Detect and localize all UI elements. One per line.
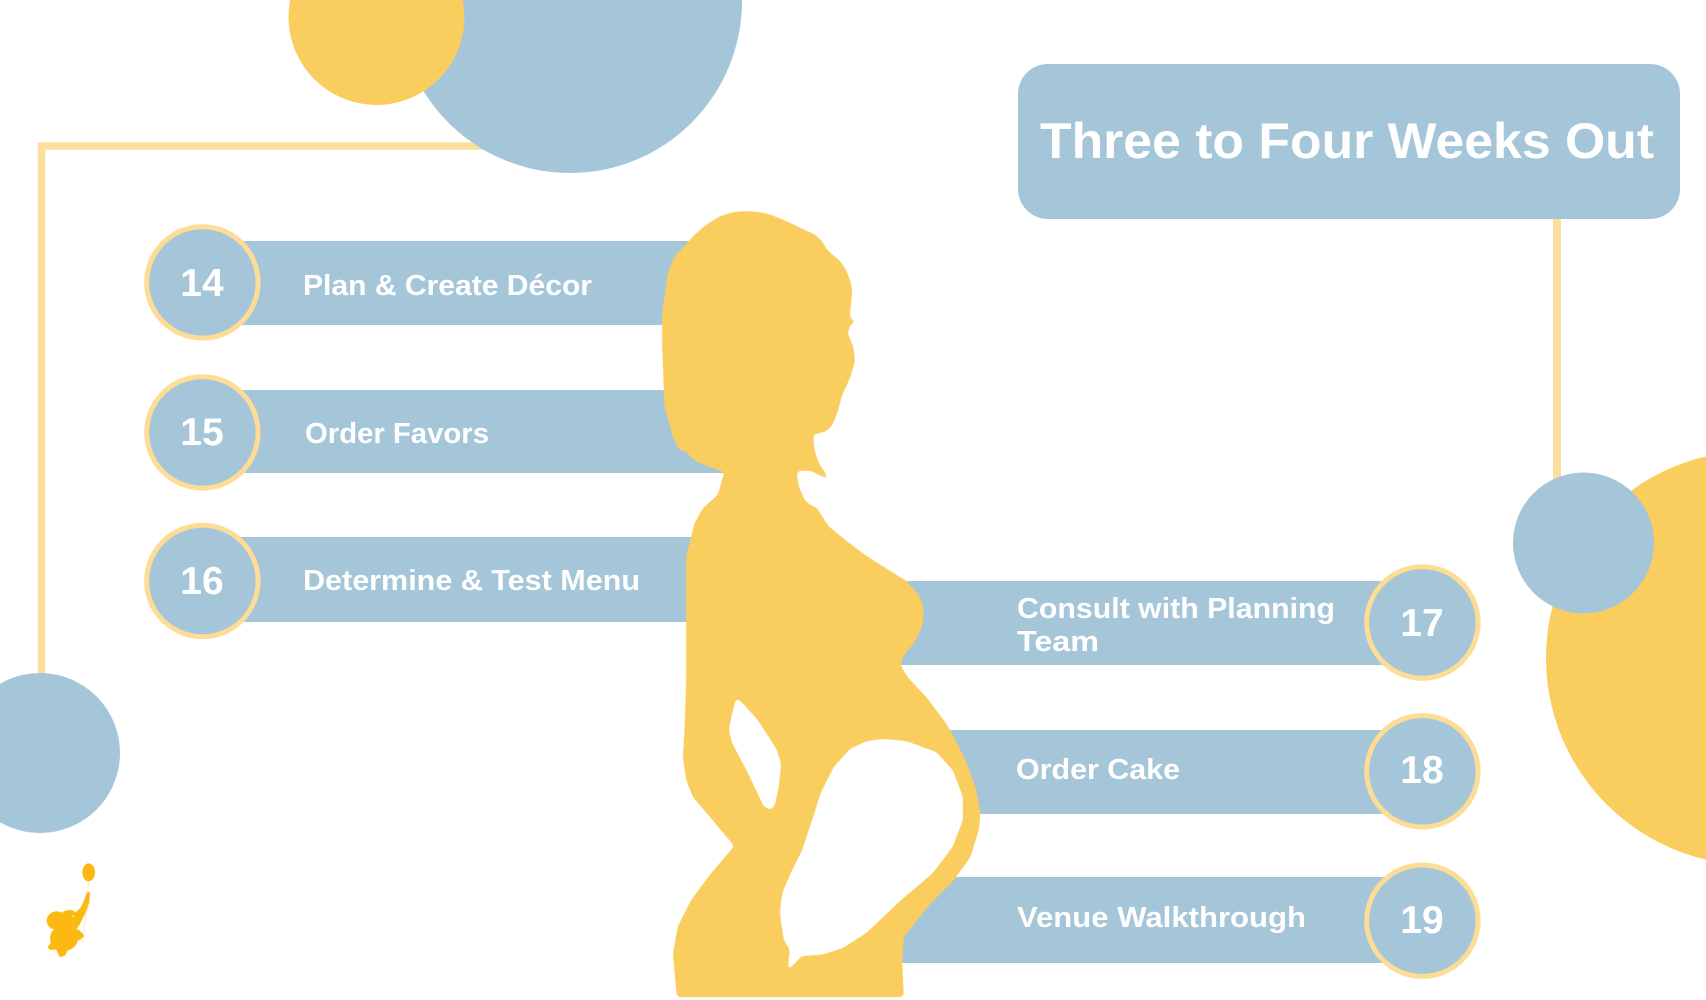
circle: yellow top <box>288 0 464 105</box>
silhouette: pregnant woman <box>663 212 980 997</box>
step 17 label: Team <box>1017 626 1099 658</box>
icon: elephant with balloon <box>47 863 95 957</box>
number badge 17: 17 <box>1400 602 1444 645</box>
number badge 19: 19 <box>1400 899 1444 942</box>
number badge 17 <box>1367 567 1478 678</box>
connector line: right <box>1553 215 1561 485</box>
number badge 14: 14 <box>180 262 224 305</box>
bar: step 18 <box>945 730 1422 814</box>
circle: large blue top <box>398 0 742 173</box>
circle: large yellow right <box>1546 451 1706 865</box>
number badge 16 <box>147 525 258 637</box>
step 17 label <box>1017 593 1335 658</box>
bar: step 17 <box>860 581 1422 665</box>
step 19 label: Venue Walkthrough <box>1017 902 1306 934</box>
step 18 label: Order Cake <box>1016 754 1180 786</box>
connector line: top left <box>42 146 490 680</box>
number badge 14 <box>147 227 258 338</box>
step 15 label: Order Favors <box>305 418 489 450</box>
step 14 label: Plan & Create Décor <box>303 270 592 302</box>
bar: step 14 <box>202 241 722 325</box>
number badge 15: 15 <box>180 411 224 454</box>
number badge 19 <box>1367 865 1478 976</box>
circle: blue bottom left <box>0 673 120 833</box>
bar: step 19 <box>875 877 1422 963</box>
step 17 label: Consult with Planning <box>1017 593 1335 625</box>
number badge 18: 18 <box>1400 749 1444 792</box>
circle: blue right <box>1513 472 1654 614</box>
bar: step 15 <box>202 390 724 473</box>
step 16 label: Determine & Test Menu <box>303 565 640 597</box>
title text: Three to Four Weeks Out <box>1040 113 1654 169</box>
number badge 18 <box>1367 716 1478 827</box>
number badge 15 <box>147 377 258 488</box>
title panel <box>1018 64 1680 219</box>
bar: step 16 <box>202 537 702 622</box>
number badge 16: 16 <box>180 560 224 603</box>
